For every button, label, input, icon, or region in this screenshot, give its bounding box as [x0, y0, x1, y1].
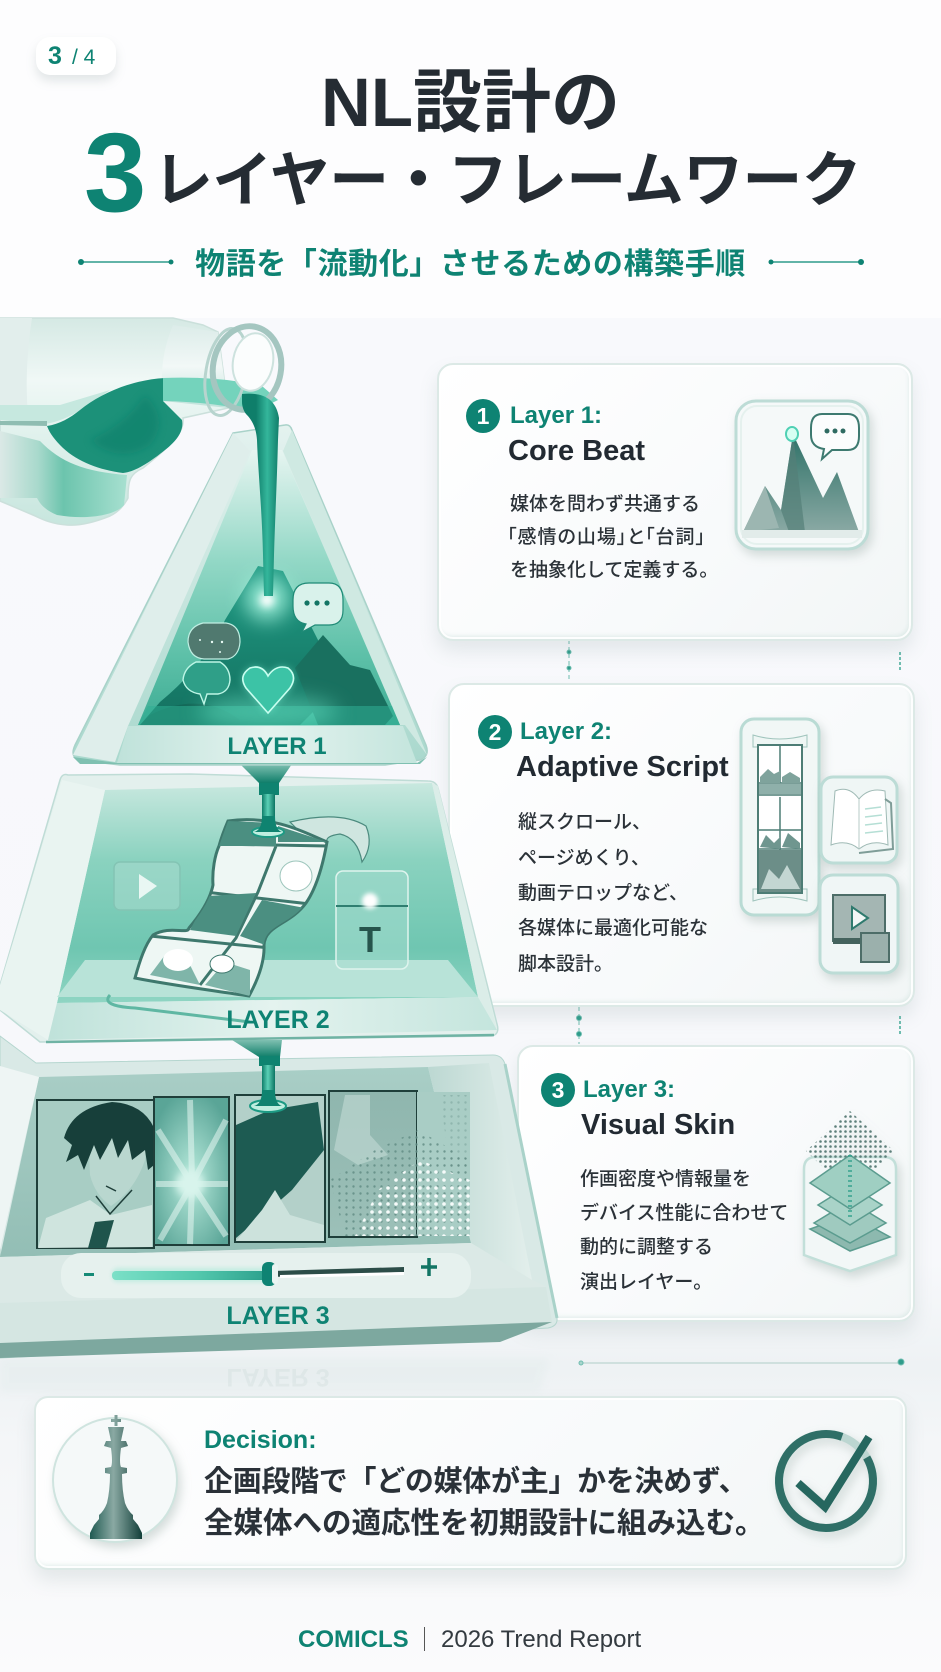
lower background section	[0, 318, 941, 1368]
speech bubble dark	[188, 623, 240, 659]
manga panel: character	[37, 1100, 160, 1248]
layer 2 description	[518, 812, 708, 975]
layer 2 description: 動画テロップなど、	[518, 883, 688, 904]
comic film ribbon	[108, 817, 369, 1022]
panel: layer 3 card	[517, 1045, 915, 1322]
decision statement: 企画段階で「どの媒体が主」かを決めず、	[204, 1466, 747, 1498]
layer 1 label: Layer 1:	[510, 402, 602, 429]
layer 1 description: 媒体を問わず共通する	[510, 494, 700, 515]
decision statement: 全媒体への適応性を初期設計に組み込む。	[204, 1507, 765, 1540]
layer 3 description	[580, 1169, 788, 1293]
layer 3 reflection	[0, 1358, 550, 1392]
subtitle rule right	[768, 259, 864, 265]
layer 3 description: 動的に調整する	[580, 1237, 713, 1258]
slider control	[61, 1253, 471, 1298]
layer 3 description: 演出レイヤー。	[580, 1272, 712, 1293]
layer 2 description: 縦スクロール、	[518, 812, 651, 833]
neon heart	[243, 667, 294, 713]
bottle	[0, 318, 288, 525]
panel: decision	[34, 1396, 907, 1570]
layer 3 glass tier	[0, 1036, 557, 1358]
text tile: T	[359, 919, 381, 960]
play tile	[114, 862, 180, 910]
layer 3 description: 作画密度や情報量を	[580, 1169, 751, 1190]
footer divider	[424, 1627, 425, 1651]
layer 3 label: Layer 3:	[583, 1076, 675, 1103]
footer brand: COMICLS	[298, 1626, 409, 1653]
layer 2 description: 各媒体に最適化可能な	[518, 918, 708, 939]
layer 1 label: LAYER 1	[227, 733, 327, 760]
panel: layer 2 card	[448, 683, 915, 1007]
badge current page: 3	[48, 42, 62, 70]
panel: layer 1 card	[437, 363, 913, 641]
title	[84, 64, 861, 235]
liquid dark	[47, 378, 182, 473]
icon: webtoon scroll tile	[738, 718, 828, 926]
layer 1 nameplate band	[117, 726, 417, 763]
icon: video tile	[818, 874, 906, 984]
number badge 3	[541, 1073, 575, 1107]
icon: stacked skin layers	[802, 1111, 904, 1280]
icon: chess king	[51, 1415, 185, 1552]
icon: book tile	[820, 776, 906, 874]
manga panel: dark cliff	[235, 1095, 325, 1242]
number badge 1: 1	[477, 403, 489, 429]
liquid stream	[242, 394, 279, 596]
layer 1 glass tier	[73, 425, 427, 765]
subtitle: 物語を「流動化」させるための構築手順	[195, 248, 746, 281]
manga panel: halftone	[329, 1091, 470, 1237]
number badge 2	[478, 715, 512, 749]
mountains	[138, 566, 400, 728]
layer 3 nameplate: LAYER 3	[226, 1302, 330, 1330]
layer 2 description: 脚本設計。	[518, 954, 613, 975]
layer 2 glass tier	[0, 774, 498, 1042]
connector: layer 1 to 2	[240, 764, 292, 837]
title numeral 3: 3	[84, 110, 146, 235]
footer report: 2026 Trend Report	[441, 1626, 641, 1653]
speech bubble outline	[183, 662, 230, 704]
layer 1 name: Core Beat	[508, 435, 645, 467]
bottle neck rings	[199, 325, 253, 419]
subtitle rule left	[78, 259, 174, 265]
number badge 2: 2	[489, 719, 501, 745]
layer 3 reflection: LAYER 3	[226, 1363, 330, 1391]
layer 2 description: ページめくり、	[518, 848, 650, 869]
connector: layer 2 to 3	[232, 1040, 286, 1112]
layer 2 label: Layer 2:	[520, 718, 612, 745]
floor background section	[0, 1368, 941, 1672]
text tile	[336, 871, 408, 969]
layer 1 description: を抽象化して定義する。	[510, 560, 718, 581]
footer	[298, 1626, 641, 1653]
icon: check mark	[774, 1430, 884, 1541]
speech bubble white	[293, 583, 343, 632]
number badge 3: 3	[552, 1077, 564, 1103]
layer 1 description: 「感情の山場」と「台詞」	[507, 527, 706, 548]
layer 3 name: Visual Skin	[581, 1109, 735, 1141]
icon: mountain tile	[734, 400, 876, 560]
liquid light	[0, 431, 127, 517]
manga panel: burst	[154, 1097, 229, 1245]
number badge 1	[466, 399, 500, 433]
decision label: Decision:	[204, 1426, 317, 1454]
layer 1 description	[507, 494, 718, 581]
badge total pages: / 4	[72, 46, 95, 69]
layer 2 name: Adaptive Script	[516, 751, 729, 783]
illustration: glass pyramid with pouring bottle	[0, 317, 558, 1387]
layer 3 description: デバイス性能に合わせて	[580, 1203, 788, 1224]
title line 1: NL設計の	[321, 64, 620, 141]
title line 2: レイヤー・フレームワーク	[153, 147, 861, 214]
layer 2 nameplate: LAYER 2	[226, 1006, 330, 1034]
decision statement	[204, 1466, 765, 1540]
page badge	[36, 37, 116, 75]
